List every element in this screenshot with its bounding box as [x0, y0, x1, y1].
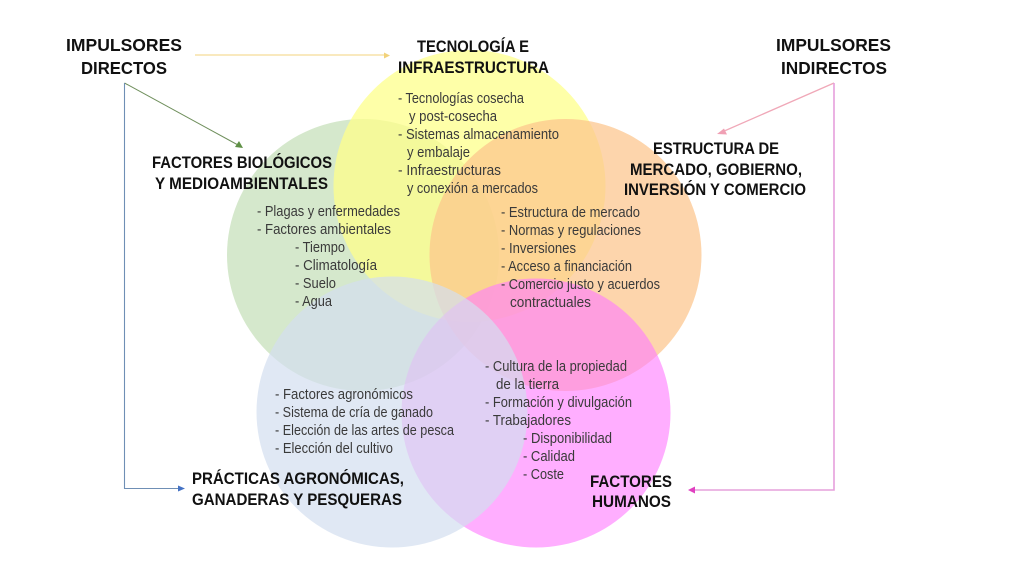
heading: factores biológicos — [152, 153, 332, 193]
heading: tecnología e infraestructura — [398, 37, 549, 77]
heading: impulsores directos — [66, 35, 182, 78]
list: estructura de mercado: - Acceso a financiación — [501, 259, 632, 275]
list: factores biológicos — [257, 204, 400, 310]
list: factores humanos — [485, 359, 632, 483]
panel: factores humanos — [485, 359, 672, 511]
list: factores biológicos: - Factores ambientales — [257, 222, 391, 238]
list: estructura de mercado — [501, 205, 660, 311]
list: factores humanos: - Trabajadores — [485, 413, 571, 429]
venn diagram circles — [227, 50, 702, 548]
heading: impulsores indirectos — [776, 35, 891, 78]
list: factores biológicos: - Climatología — [295, 258, 378, 274]
circle: tecnología e infraestructura — [334, 50, 606, 322]
arrow: directos to biológicos — [124, 83, 243, 148]
heading: tecnología e infraestructura: TECNOLOGÍA E — [417, 37, 529, 56]
list: estructura de mercado: - Inversiones — [501, 241, 576, 257]
list: estructura de mercado: - Normas y regulaciones — [501, 223, 641, 239]
heading: factores humanos: FACTORES — [590, 473, 672, 491]
heading: impulsores directos: IMPULSORES — [66, 35, 182, 55]
circle: prácticas agronómicas — [256, 276, 528, 548]
arrow: indirectos to factores humanos — [688, 83, 834, 494]
list: factores humanos: - Cultura de la propiedad — [485, 359, 627, 375]
heading: estructura de mercado: INVERSIÓN Y COMERCIO — [624, 180, 806, 199]
list: estructura de mercado: - Estructura de mercado — [501, 205, 640, 221]
list: factores biológicos: - Agua — [295, 294, 333, 310]
list: factores humanos: - Disponibilidad — [523, 431, 612, 447]
arrow: directos to tecnología — [195, 52, 390, 58]
heading: prácticas agronómicas: PRÁCTICAS AGRONÓMICAS, — [192, 469, 404, 488]
list: tecnología e infraestructura: y embalaje — [407, 145, 470, 161]
heading: factores biológicos: FACTORES BIOLÓGICOS — [152, 153, 332, 172]
list: factores biológicos: - Plagas y enfermedades — [257, 204, 400, 220]
list: estructura de mercado: contractuales — [510, 295, 591, 311]
panel: factores biológicos y medioambientales — [152, 153, 400, 310]
list: prácticas agronómicas: - Elección del cultivo — [275, 441, 393, 457]
heading: factores humanos — [590, 473, 672, 511]
list: factores biológicos: - Tiempo — [295, 240, 345, 256]
list: tecnología e infraestructura: y post-cosecha — [409, 109, 498, 125]
heading: factores humanos: HUMANOS — [592, 493, 671, 511]
heading: tecnología e infraestructura: INFRAESTRUCTURA — [398, 59, 549, 77]
list: prácticas agronómicas: - Factores agronómicos — [275, 387, 413, 403]
panel: prácticas agronómicas — [192, 387, 455, 509]
list: prácticas agronómicas: - Sistema de cría de ganado — [275, 405, 433, 421]
panel: tecnología e infraestructura — [398, 37, 559, 197]
list: tecnología e infraestructura — [398, 91, 559, 197]
heading: estructura de mercado: ESTRUCTURA DE — [653, 140, 779, 158]
list: prácticas agronómicas: - Elección de las artes de pesca — [275, 423, 455, 439]
heading: estructura de mercado — [624, 140, 806, 199]
list: estructura de mercado: - Comercio justo y acuerdos — [501, 277, 660, 293]
list: factores humanos: - Calidad — [523, 449, 575, 465]
list: tecnología e infraestructura: y conexión a mercados — [407, 181, 538, 197]
heading: prácticas agronómicas — [192, 469, 404, 509]
list: tecnología e infraestructura: - Infraestructuras — [398, 163, 501, 179]
circle: factores biológicos — [227, 119, 499, 391]
heading: impulsores directos: DIRECTOS — [81, 58, 167, 78]
arrow: indirectos to estructura de mercado — [717, 83, 834, 134]
heading: prácticas agronómicas: GANADERAS Y PESQUERAS — [192, 491, 402, 509]
list: prácticas agronómicas — [275, 387, 455, 457]
panel: estructura de mercado — [501, 140, 806, 311]
list: tecnología e infraestructura: - Tecnologías cosecha — [398, 91, 525, 107]
heading: impulsores indirectos: IMPULSORES — [776, 35, 891, 55]
heading: impulsores indirectos: INDIRECTOS — [781, 58, 887, 78]
heading: estructura de mercado: MERCADO, GOBIERNO, — [630, 161, 802, 179]
list: tecnología e infraestructura: - Sistemas almacenamiento — [398, 127, 559, 143]
circle: estructura de mercado — [430, 119, 702, 391]
list: factores humanos: - Coste — [523, 467, 564, 483]
list: factores humanos: de la tierra — [496, 377, 560, 393]
arrow: directos to prácticas — [124, 83, 185, 492]
heading: factores biológicos: Y MEDIOAMBIENTALES — [155, 175, 328, 193]
list: factores biológicos: - Suelo — [295, 276, 336, 292]
circle: factores humanos — [402, 278, 670, 548]
list: factores humanos: - Formación y divulgación — [485, 395, 632, 411]
